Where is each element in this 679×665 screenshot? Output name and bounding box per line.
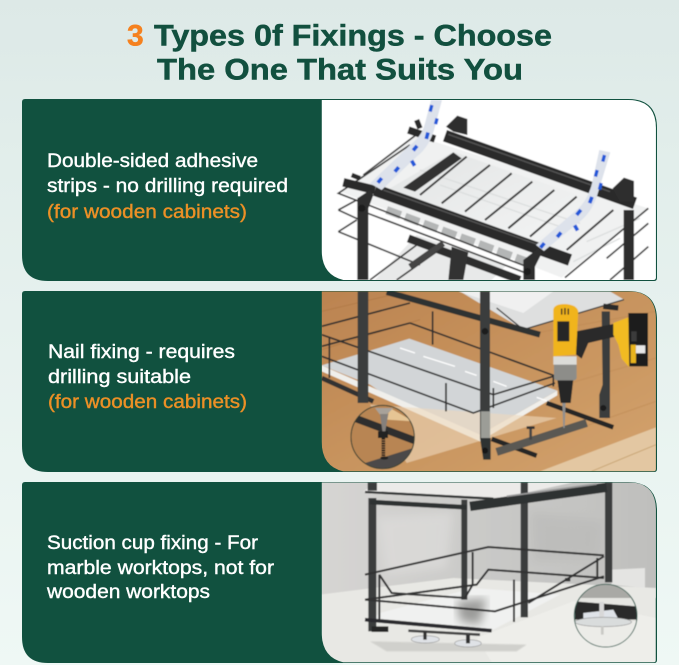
panel 3 description: wooden worktops [46,581,210,603]
panel 1 description: (for wooden cabinets) [47,201,247,223]
panel 3 description: Suction cup fixing - For [47,532,259,554]
posts [357,116,634,280]
black mounting beams [343,120,635,260]
shelf surface [373,588,560,630]
adhesive strip left [370,100,442,190]
basket base rail [365,620,492,631]
drill bit [562,403,566,428]
panel 2 description [48,341,247,413]
suction cups [411,631,481,647]
panel 3 photo: rack on marble [320,478,660,665]
panel: adhesive strips [22,95,660,285]
panel: suction cup fixing [22,478,660,665]
upper rails [365,484,607,507]
panel 2 description: (for wooden cabinets) [48,391,247,413]
upper shelf [462,292,624,329]
marble wall [320,478,660,598]
panel 1 green card [22,99,657,281]
marble floor [320,578,656,665]
inset circle: screw detail [350,405,417,475]
title [127,20,552,86]
cross bars [420,157,613,250]
drill body [553,304,578,356]
drill [553,304,648,428]
title: 3 [127,20,144,52]
panel 1 description: strips - no drilling required [47,175,288,197]
panel 3 green card [22,482,657,663]
translucent zoom beam to inset [370,405,557,463]
lower rack beam [408,238,520,280]
posts [368,482,612,631]
panel 2 green card [22,291,657,472]
panel 2 photo: drill on wood surface [320,288,660,478]
panel 1 description [47,150,288,223]
panel 2 description: Nail fixing - requires [48,341,235,363]
drill handle [574,324,617,359]
adhesive strip right [536,150,610,251]
panel 1 description: Double-sided adhesive [47,150,258,172]
glass shelf [340,136,648,278]
wire basket [365,547,604,622]
title: The One That Suits You [157,54,523,86]
panel 2 description: drilling suitable [48,366,191,388]
strip blue markings [376,105,606,249]
drill battery [628,313,648,366]
wire rails [338,136,648,280]
inset circle: suction cup detail [573,584,640,650]
top shelf [363,482,573,498]
beams [322,292,618,456]
drill chuck [557,380,573,403]
panel 3 description [46,532,275,603]
posts [358,291,610,460]
panel 3 description: marble worktops, not for [47,557,275,579]
title: Types 0f Fixings - Choose [154,20,552,52]
wire rails [322,303,555,413]
panel 1 photo: rack with adhesive strips [320,95,660,285]
lower shelf [322,339,557,435]
light floor strip [540,427,656,471]
panel: nail fixing [22,288,660,478]
